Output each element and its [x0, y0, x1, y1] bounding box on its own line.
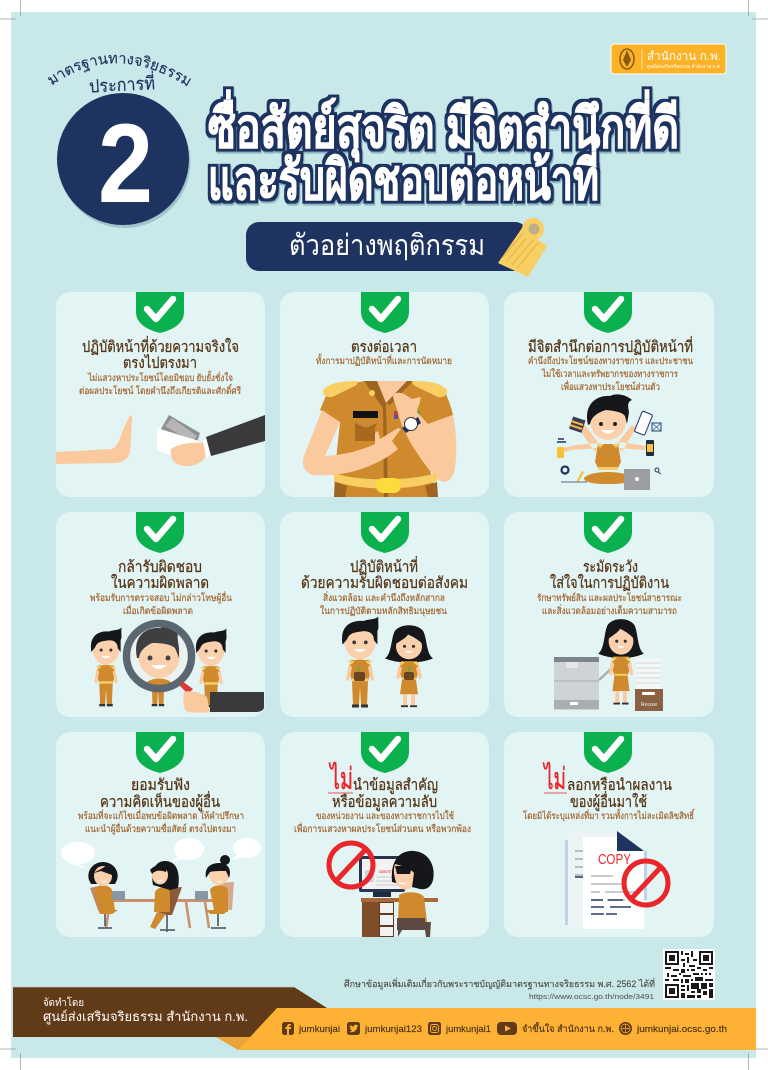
heading: ยอมรับฟัง — [131, 777, 190, 794]
description: ต่อผลประโยชน์ โดยคำนึงถึงเกียรติและศักดิ์ศรี — [79, 383, 241, 397]
heading: ปฏิบัติหน้าที่ — [350, 556, 418, 576]
icon: check shield — [361, 512, 409, 553]
panel: social responsibility — [280, 512, 489, 717]
footer: organizer banner — [13, 987, 327, 1050]
illustration: two officers holding a plant — [342, 616, 433, 707]
icon: prohibited — [624, 861, 668, 905]
behaviour examples banner — [246, 218, 547, 277]
description — [537, 592, 682, 617]
description — [294, 810, 471, 835]
heading — [543, 761, 672, 812]
logo: OCSC office: สำนักงาน ก.พ. — [647, 49, 721, 63]
icon: check shield — [361, 732, 409, 773]
further reading note: https://www.ocsc.go.th/node/3491 — [529, 994, 654, 1001]
illustration: woman at copier — [554, 619, 663, 711]
heading: ไม่ — [543, 761, 566, 796]
description: ในการปฏิบัติตามหลักสิทธิมนุษยชน — [320, 605, 447, 617]
illustration: multitasking officer — [557, 394, 661, 490]
icon: check shield — [584, 292, 632, 333]
icon: check shield — [361, 292, 409, 333]
logo: OCSC office: ศูนย์ส่งเสริมจริยธรรม สำนักงาน ก.พ. — [647, 63, 721, 70]
illustration: uniform and wristwatch — [303, 381, 456, 497]
footer: social links: จำขึ้นใจ สำนักงาน ก.พ. — [522, 1022, 614, 1035]
heading — [100, 777, 220, 812]
description: ทั้งการมาปฏิบัติหน้าที่และการนัดหมาย — [316, 353, 452, 367]
description: ของหน่วยงาน และของทางราชการไปใช้ — [316, 810, 454, 822]
heading: ใส่ใจในการปฏิบัติงาน — [550, 574, 669, 592]
heading — [550, 559, 669, 592]
panel: careful at work — [504, 512, 714, 717]
panel: confidential data — [280, 732, 489, 937]
icon: check shield — [136, 512, 184, 553]
heading — [111, 559, 209, 592]
illustration: stealing data at a computer — [329, 843, 438, 937]
description: โดยมิได้ระบุแหล่งที่มา รวมทั้งการไม่ละเมิดลิขสิทธิ์ — [523, 808, 695, 822]
heading: หรือข้อมูลความลับ — [332, 793, 437, 812]
illustration: copied documents: COPY — [598, 851, 631, 868]
curved heading: standard number: ประการที่ — [88, 70, 155, 97]
heading: นำข้อมูลสำคัญ — [353, 777, 438, 795]
description — [90, 591, 232, 617]
footer: social links: jumkunjai.ocsc.go.th — [636, 1024, 727, 1035]
further reading note — [344, 977, 655, 1001]
main title — [208, 89, 679, 211]
icon: check shield — [136, 292, 184, 333]
description — [528, 355, 693, 393]
icon: instagram — [428, 1022, 441, 1035]
description — [79, 370, 241, 397]
icon: name tag — [498, 218, 547, 277]
icon: check shield — [136, 732, 184, 773]
heading — [301, 556, 468, 592]
heading: ปฏิบัติหน้าที่ด้วยความจริงใจ — [82, 336, 239, 356]
panel: listening to others — [56, 732, 265, 937]
heading: ตรงต่อเวลา — [351, 339, 417, 356]
footer: social links — [238, 1008, 756, 1050]
icon: website — [619, 1022, 632, 1035]
heading: มีจิตสำนึกต่อการปฏิบัติหน้าที่ — [528, 336, 693, 356]
QR code — [663, 949, 715, 1000]
panel: punctuality — [280, 292, 489, 497]
icon: prohibited — [329, 843, 373, 887]
heading: ไม่ — [329, 761, 353, 796]
heading — [82, 336, 239, 372]
heading: ของผู้อื่นมาใช้ — [570, 791, 647, 812]
panel: owning mistakes — [56, 512, 265, 717]
footer: organizer banner: ศูนย์ส่งเสริมจริยธรรม สำนักงาน ก.พ. — [43, 1009, 248, 1025]
illustration: meeting at a table — [61, 838, 261, 932]
icon: check shield — [584, 732, 632, 773]
icon: facebook — [282, 1022, 294, 1035]
description — [320, 591, 447, 617]
number badge: 2 — [98, 101, 153, 226]
description: เพื่อแสวงหาประโยชน์ส่วนตัว — [561, 380, 660, 393]
heading: ตรงไปตรงมา — [123, 354, 197, 372]
icon: twitter — [347, 1022, 360, 1035]
description: และสิ่งแวดล้อมอย่างเต็มความสามารถ — [542, 604, 677, 617]
main title: และรับผิดชอบต่อหน้าที่ — [208, 141, 599, 211]
curved heading: standard number: มาตรฐานทางจริยธรรม — [48, 54, 191, 86]
description: พร้อมรับการตรวจสอบ ไม่กล่าวโทษผู้อื่น — [90, 591, 232, 604]
description: ไม่แสวงหาประโยชน์โดยมิชอบ ยับยั้งชั่งใจ — [87, 370, 233, 384]
description — [78, 809, 244, 835]
heading: ด้วยความรับผิดชอบต่อสังคม — [301, 575, 468, 592]
panel: no plagiarism — [504, 732, 714, 937]
description: ไม่ใช้เวลาและทรัพยากรของทางราชการ — [541, 368, 678, 380]
description: คำนึงถึงประโยชน์ของทางราชการ และประชาชน — [528, 355, 693, 367]
panel: sincerity and directness — [56, 292, 265, 497]
illustration: stealing data at a computer: IDENTITY — [379, 869, 394, 874]
description: สิ่งแวดล้อม และคำนึงถึงหลักสากล — [323, 591, 445, 604]
footer: social links: jumkunjai — [298, 1024, 340, 1035]
footer: social links: jumkunjai1 — [445, 1024, 491, 1035]
illustration: magnifier on officers — [91, 623, 264, 713]
description: เพื่อการแสวงหาผลประโยชน์ส่วนตน หรือพวกพ้อง — [294, 822, 471, 835]
icon: check shield — [584, 512, 632, 553]
footer: social links: jumkunjai123 — [364, 1024, 422, 1035]
heading: ระมัดระวัง — [583, 559, 638, 576]
description: แนะนำผู้อื่นด้วยความซื่อสัตย์ ตรงไปตรงมา — [85, 822, 236, 835]
description: รักษาทรัพย์สิน และผลประโยชน์สาธารณะ — [537, 592, 682, 604]
panel: work awareness — [504, 292, 714, 497]
footer: organizer banner: จัดทำโดย — [43, 996, 84, 1009]
illustration: copied documents — [565, 831, 668, 929]
icon: youtube — [497, 1022, 517, 1035]
description: พร้อมที่จะแก้ไขเมื่อพบข้อผิดพลาด ให้คำปรึกษา — [78, 809, 244, 822]
logo: OCSC office — [611, 44, 726, 74]
heading: ลอกหรือนำผลงาน — [567, 776, 672, 794]
behaviour examples banner: ตัวอย่างพฤติกรรม — [289, 230, 485, 262]
further reading note: ศึกษาข้อมูลเพิ่มเติมเกี่ยวกับพระราชบัญญัติมาตรฐานทางจริยธรรม พ.ศ. 2562 ได้ที่ — [344, 977, 655, 990]
illustration: woman at copier: Reuse — [641, 702, 657, 708]
illustration: refusing a bribe — [56, 415, 265, 466]
description: เมื่อเกิดข้อผิดพลาด — [123, 604, 193, 617]
number badge — [57, 93, 190, 228]
heading — [328, 761, 438, 812]
heading: ในความผิดพลาด — [111, 574, 209, 592]
heading: กล้ารับผิดชอบ — [118, 559, 202, 576]
heading: ความคิดเห็นของผู้อื่น — [100, 791, 220, 812]
